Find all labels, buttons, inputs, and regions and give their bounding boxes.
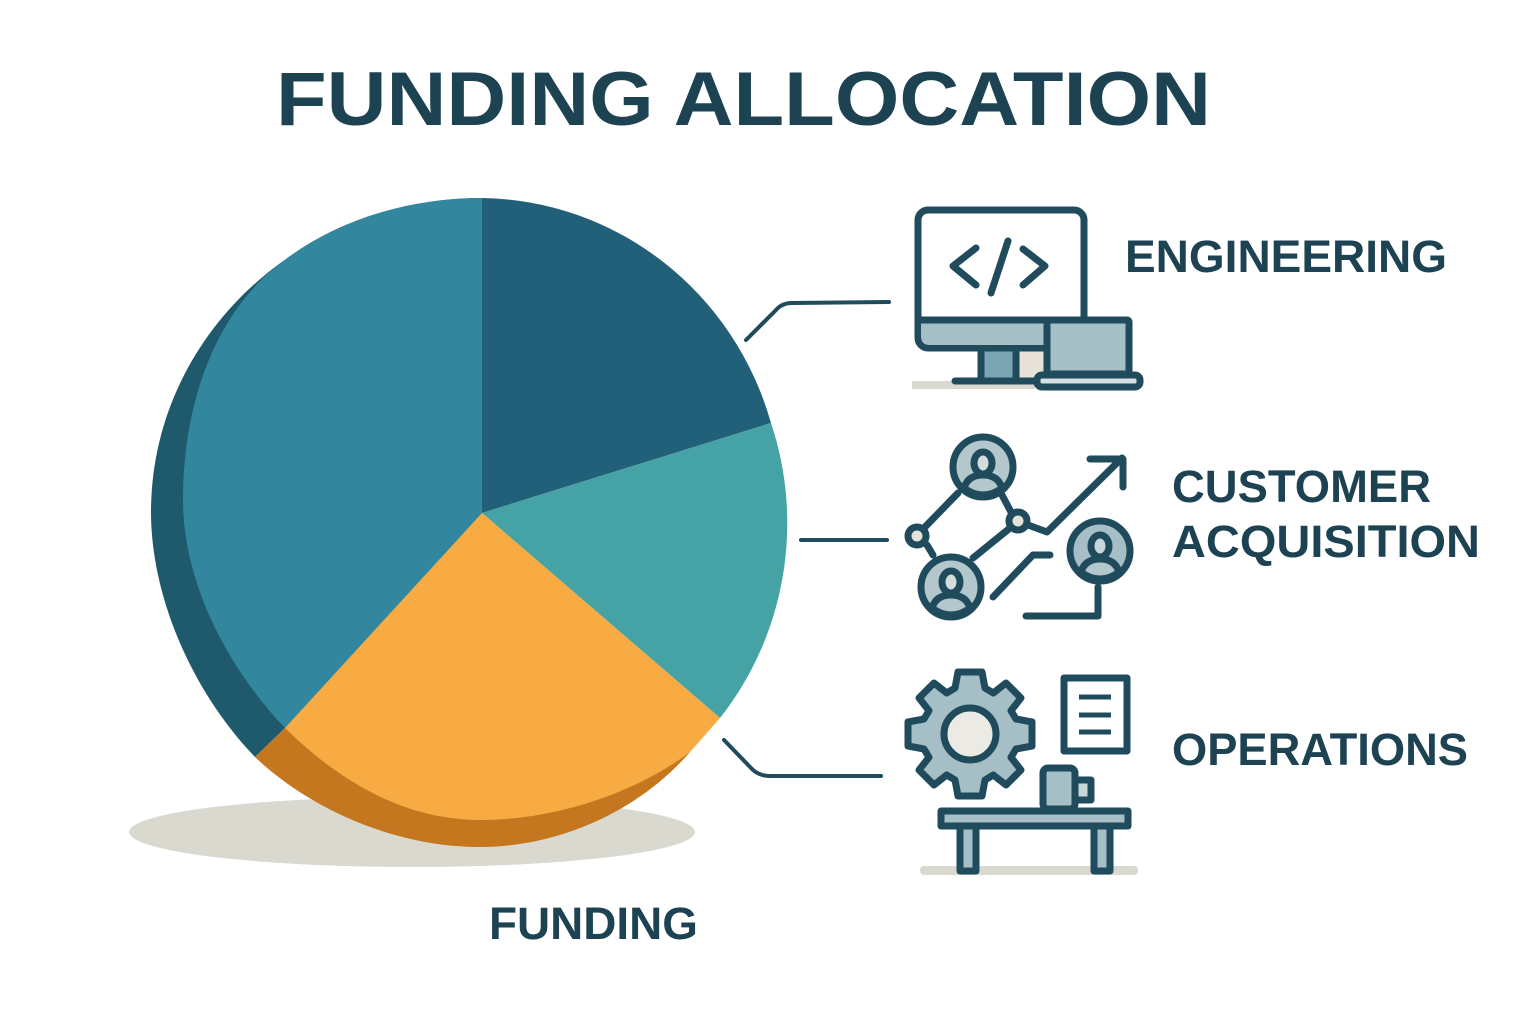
slice: teal customer acquisition	[482, 423, 787, 718]
icon: computer and laptop	[912, 210, 1140, 389]
label: engineering: ENGINEERING	[1125, 231, 1447, 282]
connector: operations	[724, 740, 881, 776]
icon: customer network with growth arrow	[908, 437, 1130, 617]
label: funding: FUNDING	[489, 898, 698, 949]
slice: dark blue engineering	[482, 198, 771, 513]
gear	[908, 672, 1032, 796]
pie ground shadow	[129, 797, 695, 867]
slice: orange operations	[285, 513, 720, 820]
pie side: dark orange edge	[255, 513, 690, 847]
pie side: dark blue edge	[151, 198, 482, 757]
person circle 2	[921, 557, 981, 617]
title: FUNDING ALLOCATION	[276, 57, 1211, 142]
pie chart	[129, 198, 787, 867]
connector: customer acquisition	[801, 538, 887, 542]
label: operations: OPERATIONS	[1172, 724, 1468, 775]
person circle 3	[1070, 521, 1130, 581]
document	[1064, 678, 1127, 751]
desk	[960, 826, 976, 871]
connector: engineering	[746, 302, 889, 340]
icon: gear, document, mug and desk	[908, 672, 1138, 875]
person circle 1	[953, 437, 1013, 497]
slice: large blue	[183, 198, 482, 728]
label: customer acquisition: ACQUISITION	[1172, 516, 1480, 567]
label: customer acquisition: CUSTOMER	[1172, 461, 1431, 512]
mug	[1076, 780, 1091, 800]
label: customer acquisition	[1172, 461, 1480, 567]
